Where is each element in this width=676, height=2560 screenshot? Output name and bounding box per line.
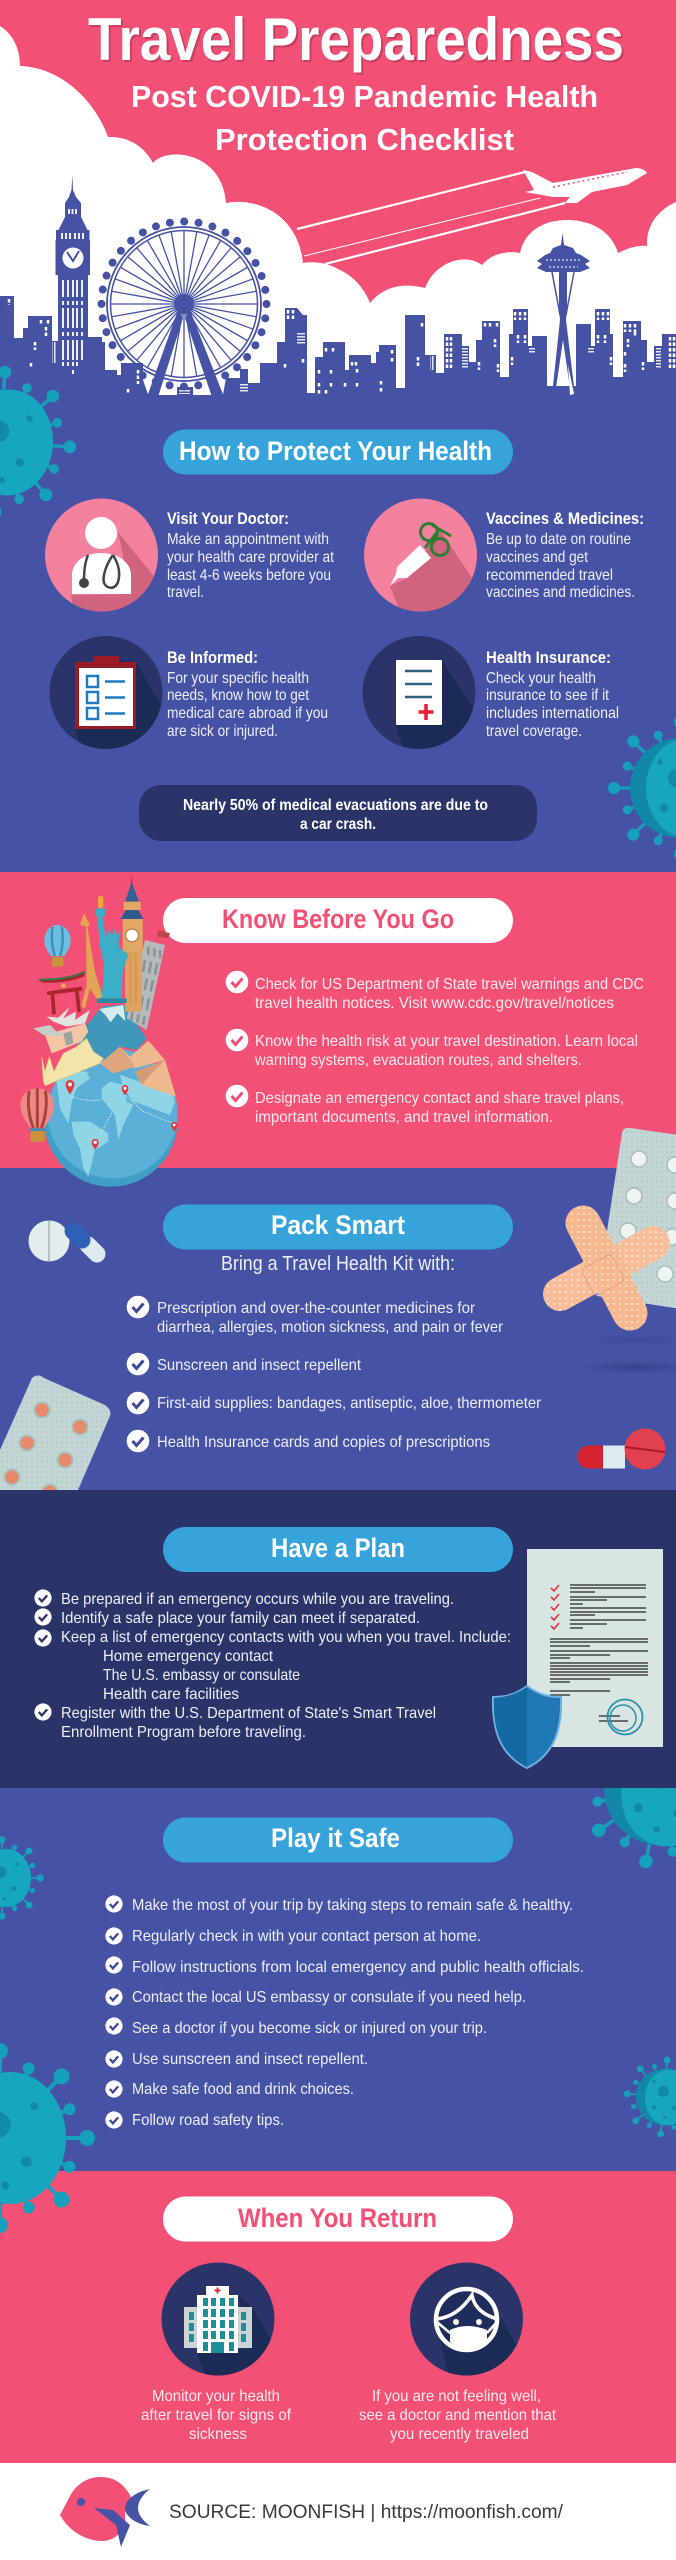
panel: know before you go bbox=[0, 872, 676, 1168]
text: monitor your health: Monitor your health bbox=[152, 2388, 280, 2405]
icon: clipboard bbox=[50, 636, 162, 749]
text: health insurance: Check your health bbox=[486, 670, 596, 687]
text: be informed: For your specific health bbox=[167, 670, 309, 687]
checklist: Sunscreen and insect repellent bbox=[157, 1357, 362, 1374]
text: visit your doctor: your health care provider at bbox=[167, 549, 334, 566]
heading pill: When You Return bbox=[238, 2203, 437, 2233]
checklist: Follow road safety tips. bbox=[132, 2112, 284, 2129]
checklist: Enrollment Program before traveling. bbox=[61, 1724, 306, 1741]
callout: medical evacuations bbox=[139, 785, 537, 841]
checklist: Identify a safe place your family can meet if separated. bbox=[61, 1610, 420, 1627]
checklist: Know the health risk at your travel destination. Learn local bbox=[255, 1033, 638, 1050]
checklist: Keep a list of emergency contacts with you when you travel. Include: bbox=[61, 1629, 511, 1646]
checklist: warning systems, evacuation routes, and shelters. bbox=[254, 1052, 582, 1069]
icon: hospital bbox=[162, 2262, 274, 2376]
text: health insurance: Health Insurance: bbox=[486, 649, 611, 667]
subtitle bbox=[131, 79, 598, 157]
illustration: globe with landmarks bbox=[20, 875, 178, 1187]
checklist: Prescription and over-the-counter medicines for bbox=[157, 1300, 476, 1317]
icon: shadows under bandage bbox=[576, 1334, 676, 1374]
text: if you are not feeling well: you recently traveled bbox=[390, 2426, 529, 2443]
checklist: Designate an emergency contact and share travel plans, bbox=[255, 1090, 624, 1107]
checklist: Contact the local US embassy or consulate if you need help. bbox=[132, 1989, 526, 2006]
text: if you are not feeling well: see a doctor and mention that bbox=[359, 2407, 557, 2424]
icon: syringe bbox=[364, 498, 477, 612]
checklist: travel health notices. Visit www.cdc.gov/travel/notices bbox=[255, 995, 614, 1012]
source text: SOURCE: MOONFISH | https://moonfish.com/ bbox=[169, 2502, 564, 2523]
icon: torii gate bbox=[38, 971, 85, 1014]
text: be informed: needs, know how to get bbox=[167, 687, 309, 704]
icon: map pins bbox=[66, 1080, 177, 1150]
heading pill bbox=[163, 1204, 513, 1250]
heading pill bbox=[163, 1818, 513, 1862]
icon: statue of liberty bbox=[96, 896, 128, 1003]
text: visit your doctor: Make an appointment with bbox=[167, 531, 329, 548]
subtitle: Post COVID-19 Pandemic Health bbox=[131, 79, 598, 114]
text: visit your doctor bbox=[167, 510, 334, 601]
checklist: Register with the U.S. Department of State's Smart Travel bbox=[61, 1705, 436, 1722]
heading pill bbox=[163, 1527, 513, 1572]
icon: document with seal bbox=[527, 1549, 663, 1747]
icon: space needle bbox=[537, 233, 590, 395]
checklist: Make safe food and drink choices. bbox=[132, 2081, 354, 2098]
icon: virus upper left bbox=[0, 361, 81, 523]
text: if you are not feeling well: If you are not feeling well, bbox=[372, 2388, 541, 2405]
panel: pack smart bbox=[0, 1128, 676, 1500]
panel: have a plan bbox=[0, 1490, 676, 1788]
checklist: Health care facilities bbox=[103, 1686, 239, 1703]
icon: virus right bbox=[608, 716, 676, 860]
icon: virus left small bbox=[0, 1836, 44, 1920]
icon: white pill and capsule bbox=[28, 1220, 97, 1262]
text: be informed: are sick or injured. bbox=[167, 723, 278, 740]
icon: doctor bbox=[45, 498, 158, 612]
text: visit your doctor: travel. bbox=[167, 584, 204, 601]
text: visit your doctor: Visit Your Doctor: bbox=[167, 510, 289, 528]
icon: airplane with contrails bbox=[297, 168, 647, 264]
text: be informed: medical care abroad if you bbox=[167, 705, 328, 722]
heading pill: Play it Safe bbox=[271, 1823, 400, 1853]
icon: shield bbox=[493, 1686, 561, 1768]
icon: red pill and capsule bbox=[578, 1428, 666, 1470]
title: Travel Preparedness bbox=[88, 6, 624, 73]
checklist: diarrhea, allergies, motion sickness, and pain or fever bbox=[157, 1319, 504, 1336]
heading pill bbox=[163, 2196, 513, 2242]
checklist: Home emergency contact bbox=[103, 1648, 274, 1665]
title: Travel Preparedness bbox=[90, 8, 626, 75]
checklist bbox=[105, 1895, 584, 2129]
icon: blister pack top right bbox=[597, 1128, 676, 1312]
icon: person with face mask bbox=[410, 2262, 523, 2376]
checklist bbox=[226, 971, 644, 1126]
text: health insurance bbox=[486, 649, 619, 740]
text: health insurance: includes international bbox=[486, 705, 619, 722]
text: vaccines and medicines: Vaccines & Medicines: bbox=[486, 510, 644, 528]
checklist: The U.S. embassy or consulate bbox=[103, 1667, 300, 1684]
checklist bbox=[127, 1296, 542, 1452]
checklist: Follow instructions from local emergency and public health officials. bbox=[132, 1959, 584, 1976]
icon: red hot air balloon bbox=[20, 1088, 54, 1142]
panel: how to protect your health bbox=[0, 361, 676, 873]
checklist: Check for US Department of State travel warnings and CDC bbox=[255, 976, 644, 993]
text: vaccines and medicines bbox=[486, 510, 644, 601]
checklist: Regularly check in with your contact person at home. bbox=[132, 1928, 481, 1945]
panel: play it safe bbox=[0, 1694, 676, 2171]
icon: palace bbox=[42, 1038, 103, 1086]
text: vaccines and medicines: vaccines and get bbox=[486, 549, 588, 566]
text: health insurance: insurance to see if it bbox=[486, 687, 609, 704]
icon: large virus lower left bbox=[0, 2043, 95, 2233]
checklist: important documents, and travel information. bbox=[255, 1109, 553, 1126]
text: be informed bbox=[167, 649, 328, 740]
icon: virus top right bbox=[565, 1694, 676, 1884]
skyline buildings bbox=[0, 296, 676, 400]
heading pill: Know Before You Go bbox=[222, 904, 454, 934]
icon: insurance document bbox=[362, 636, 476, 749]
callout: medical evacuations: a car crash. bbox=[300, 816, 376, 833]
text: be informed: Be Informed: bbox=[167, 649, 258, 667]
icon: ferris wheel bbox=[102, 222, 266, 397]
checklist bbox=[34, 1589, 511, 1741]
checklist: Be prepared if an emergency occurs while you are traveling. bbox=[61, 1591, 454, 1608]
cloud background bbox=[0, 26, 676, 400]
text: monitor your health: after travel for signs of bbox=[141, 2407, 292, 2424]
checklist: See a doctor if you become sick or injured on your trip. bbox=[132, 2020, 487, 2037]
icon: blue hot air balloon bbox=[44, 925, 71, 967]
icon: mountain bbox=[73, 1004, 147, 1060]
checklist: Make the most of your trip by taking steps to remain safe & healthy. bbox=[132, 1897, 573, 1914]
heading pill bbox=[163, 430, 513, 474]
icon: blister pack lower left bbox=[0, 1376, 110, 1500]
heading pill: How to Protect Your Health bbox=[179, 436, 492, 466]
text: visit your doctor: least 4-6 weeks before you bbox=[167, 567, 331, 584]
icon: clock tower small bbox=[121, 875, 143, 1012]
icon: eiffel tower bbox=[80, 913, 103, 1008]
checklist: Use sunscreen and insect repellent. bbox=[132, 2051, 368, 2068]
icon: moonfish logo bbox=[60, 2477, 150, 2547]
text: monitor your health: sickness bbox=[189, 2426, 247, 2443]
checklist: Health Insurance cards and copies of prescriptions bbox=[157, 1434, 490, 1451]
panel: when you return bbox=[0, 2171, 676, 2463]
heading pill: Pack Smart bbox=[271, 1210, 405, 1240]
icon: world globe bbox=[44, 1048, 178, 1187]
icon: virus right small bbox=[620, 2053, 676, 2141]
text: health insurance: travel coverage. bbox=[486, 723, 582, 740]
callout: medical evacuations: Nearly 50% of medical evacuations are due to bbox=[183, 797, 488, 814]
panel: hero header bbox=[0, 0, 676, 400]
text: monitor your health bbox=[141, 2388, 292, 2443]
icon: clock tower bbox=[56, 175, 90, 397]
heading pill: Have a Plan bbox=[271, 1533, 405, 1563]
heading pill bbox=[163, 898, 513, 943]
subheading: Bring a Travel Health Kit with: bbox=[221, 1253, 455, 1275]
icon: pagoda temple bbox=[33, 1007, 90, 1053]
text: vaccines and medicines: Be up to date on routine bbox=[486, 531, 631, 548]
text: if you are not feeling well bbox=[359, 2388, 557, 2443]
text: vaccines and medicines: recommended travel bbox=[486, 567, 613, 584]
text: vaccines and medicines: vaccines and medicines. bbox=[486, 584, 635, 601]
panel: source footer bbox=[0, 2463, 676, 2560]
subtitle: Protection Checklist bbox=[215, 122, 514, 157]
checklist: First-aid supplies: bandages, antiseptic, aloe, thermometer bbox=[157, 1395, 542, 1412]
icon: pyramids bbox=[100, 1041, 176, 1097]
icon: leaning tower bbox=[127, 930, 170, 1030]
icon: crossed bandage bbox=[560, 1223, 653, 1313]
